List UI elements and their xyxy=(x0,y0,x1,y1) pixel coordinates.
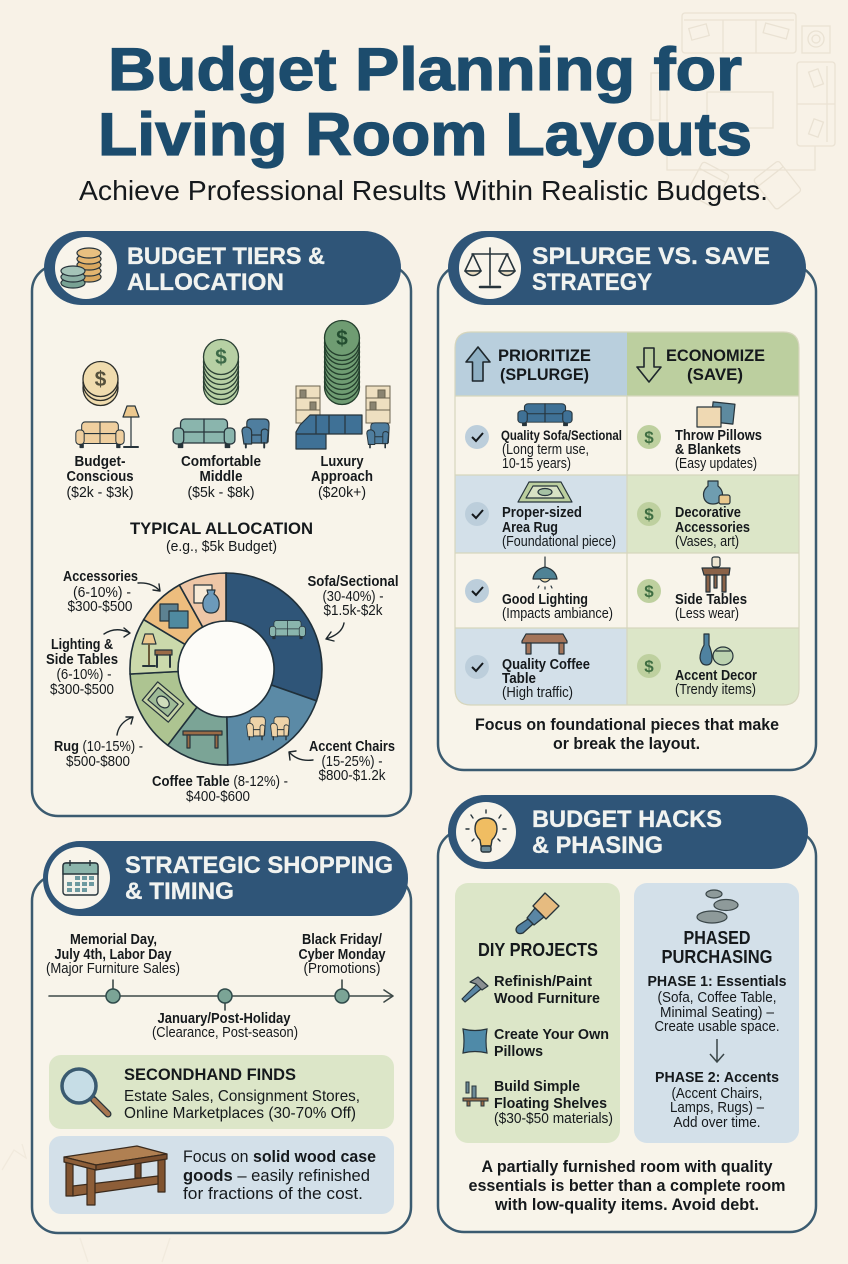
icon: calendar xyxy=(63,860,98,895)
icon: side table xyxy=(702,557,730,592)
tier: comfortable middle: Middle xyxy=(200,469,243,485)
row: quality sofa: (Long term use, xyxy=(502,442,589,458)
item: shelves: ($30-$50 materials) xyxy=(494,1111,613,1127)
item: refinish xyxy=(462,974,600,1007)
icon: coin stack large xyxy=(324,320,360,404)
milestone: black friday: Black Friday/ xyxy=(302,932,382,948)
icon: dollar: $ xyxy=(644,657,654,676)
row: decorative accessories xyxy=(637,481,750,550)
icon: wood coffee table xyxy=(64,1146,167,1205)
milestone: black friday: Cyber Monday xyxy=(298,947,386,963)
callout: secondhand finds: SECONDHAND FINDS xyxy=(124,1065,296,1084)
label: lighting and side tables: $300-$500 xyxy=(50,682,114,698)
row: good lighting: Good Lighting xyxy=(502,592,588,608)
row: quality coffee table: (High traffic) xyxy=(502,685,573,701)
callout: secondhand finds: Online Marketplaces (30-70% Off) xyxy=(124,1105,356,1122)
panel: budget tiers and allocation xyxy=(32,231,411,816)
callout: secondhand finds xyxy=(49,1055,394,1129)
icon: dollar: $ xyxy=(644,428,654,447)
icon: paint brush xyxy=(516,893,559,934)
label: sofa xyxy=(308,574,398,619)
takeaway: budget hacks: with low-quality items. Avoid debt. xyxy=(494,1195,759,1214)
icon: pendant lamp xyxy=(533,557,557,589)
tier: comfortable middle: Comfortable xyxy=(181,454,261,470)
card: DIY projects: DIY PROJECTS xyxy=(478,940,598,960)
item: refinish: Wood Furniture xyxy=(494,991,600,1007)
milestone: black friday xyxy=(298,932,386,977)
phase 2 xyxy=(655,1069,779,1131)
heading: typical allocation: TYPICAL ALLOCATION xyxy=(130,519,313,538)
row: accent decor: Accent Decor xyxy=(675,668,757,684)
row: side tables xyxy=(637,557,747,622)
takeaway: splurge vs save: or break the layout. xyxy=(553,734,700,753)
label: coffee table xyxy=(152,774,288,805)
phase 1: Create usable space. xyxy=(654,1019,780,1035)
label: lighting and side tables: (6-10%) - xyxy=(56,667,112,683)
table backgrounds xyxy=(455,332,799,705)
row: accent decor: (Trendy items) xyxy=(675,682,756,698)
takeaway: budget hacks: essentials is better than a complete room xyxy=(468,1176,786,1195)
row: side tables: Side Tables xyxy=(675,592,747,608)
row: throw pillows: (Easy updates) xyxy=(675,456,757,472)
icon: check xyxy=(465,579,489,603)
row: decorative accessories: Accessories xyxy=(675,520,750,536)
row: good lighting: (Impacts ambiance) xyxy=(502,606,613,622)
label: accessories: Accessories xyxy=(63,569,138,585)
phase 1 xyxy=(648,973,786,1035)
callout: secondhand finds: Estate Sales, Consignment Stores, xyxy=(124,1088,360,1105)
label: lighting and side tables xyxy=(46,637,118,698)
label: rug xyxy=(54,739,143,770)
row: decorative accessories: Decorative xyxy=(675,505,741,521)
label: accessories xyxy=(63,569,138,615)
icon: coin stack small: $ xyxy=(95,368,107,391)
tier: budget-conscious: Budget- xyxy=(74,454,126,470)
label: lighting and side tables: Side Tables xyxy=(46,652,118,668)
tier: budget-conscious: Conscious xyxy=(66,469,134,485)
takeaway: splurge vs save xyxy=(475,715,779,753)
row: area rug: (Foundational piece) xyxy=(502,534,616,550)
icon: check xyxy=(465,655,489,679)
tier: luxury approach: Approach xyxy=(311,469,373,485)
row: quality sofa: 10-15 years) xyxy=(502,456,571,472)
row: quality sofa xyxy=(465,404,622,472)
row: decorative accessories: (Vases, art) xyxy=(675,534,739,550)
item: pillows: Create Your Own xyxy=(494,1027,609,1043)
icon: vases xyxy=(704,481,730,504)
row: area rug xyxy=(465,482,616,550)
callout arrows xyxy=(104,583,344,760)
phase 2: PHASE 2: Accents xyxy=(655,1069,779,1086)
icon: pillows xyxy=(697,402,735,427)
milestone: january xyxy=(152,1011,298,1041)
takeaway: budget hacks: A partially furnished room with quality xyxy=(482,1157,773,1176)
row: quality sofa: Quality Sofa/Sectional xyxy=(501,428,622,443)
item: shelves: Build Simple xyxy=(494,1079,580,1095)
icon: sofa xyxy=(270,621,305,639)
icon: lamp and side table xyxy=(142,634,172,667)
icon: sectional sofa xyxy=(296,415,362,449)
icon: accent vases xyxy=(700,634,733,665)
column header: economize: (SAVE) xyxy=(687,365,743,384)
icon: coin stack medium xyxy=(204,340,238,404)
comparison table xyxy=(455,332,799,705)
phase 2: (Accent Chairs, xyxy=(672,1086,762,1102)
icon: armchair xyxy=(367,423,389,448)
phase 1: PHASE 1: Essentials xyxy=(648,973,786,990)
item: refinish: Refinish/Paint xyxy=(494,974,592,990)
milestone: january: January/Post-Holiday xyxy=(158,1011,291,1027)
tier: budget-conscious xyxy=(66,362,139,501)
panel header: budget hacks: & PHASING xyxy=(532,832,663,859)
icon: light bulb xyxy=(466,810,506,852)
column header: economize xyxy=(637,346,765,384)
icon: magnifier xyxy=(62,1069,108,1114)
callout: solid wood: for fractions of the cost. xyxy=(183,1184,363,1203)
icon: stepping stones xyxy=(697,890,738,923)
subtitle: Achieve Professional Results Within Realistic Budgets. xyxy=(79,175,768,206)
milestone: summer holidays: July 4th, Labor Day xyxy=(54,947,172,963)
milestone: summer holidays: (Major Furniture Sales) xyxy=(46,961,180,977)
row: throw pillows: & Blankets xyxy=(675,442,741,458)
item: pillows xyxy=(463,1027,609,1060)
row: throw pillows: Throw Pillows xyxy=(675,428,762,444)
panel header: strategic shopping: STRATEGIC SHOPPING xyxy=(125,852,393,879)
icon: coffee table xyxy=(522,634,567,654)
panel header: budget tiers: ALLOCATION xyxy=(127,269,284,296)
milestone: black friday: (Promotions) xyxy=(304,961,380,977)
panel header: strategic shopping: & TIMING xyxy=(125,878,234,905)
card: phased purchasing: PHASED xyxy=(684,928,750,948)
label: sofa: (30-40%) - xyxy=(322,589,384,605)
icon: coffee table xyxy=(183,731,222,748)
panel header: splurge vs save: STRATEGY xyxy=(532,269,652,296)
label: accessories: $300-$500 xyxy=(68,599,133,615)
icon: blue armchair xyxy=(242,419,269,448)
row: area rug: Proper-sized xyxy=(502,505,582,521)
icon: dollar: $ xyxy=(644,582,654,601)
icon: balance scales xyxy=(465,248,515,287)
icon: accent chairs xyxy=(247,717,289,740)
icon: coin stack medium: $ xyxy=(215,346,227,369)
label: lighting and side tables: Lighting & xyxy=(51,637,113,653)
phase 1: Minimal Seating) – xyxy=(660,1005,775,1021)
panel header: budget hacks xyxy=(448,795,808,869)
icon: pillows xyxy=(160,604,188,628)
label: accent chairs: $800-$1.2k xyxy=(318,768,386,784)
item: pillows: Pillows xyxy=(494,1044,543,1060)
icon: rug xyxy=(518,482,572,502)
takeaway: splurge vs save: Focus on foundational pieces that make xyxy=(475,715,779,734)
phase 2: Add over time. xyxy=(674,1115,760,1131)
icon: hammer xyxy=(462,977,488,1002)
card: phased purchasing xyxy=(634,883,799,1143)
row: area rug: Area Rug xyxy=(502,520,558,536)
panel: strategic shopping xyxy=(32,841,411,1233)
panel header: splurge vs save: SPLURGE VS. SAVE xyxy=(532,243,770,270)
icon: coin stack large: $ xyxy=(336,327,348,350)
tier: comfortable middle xyxy=(173,340,269,501)
icon: bookcases xyxy=(296,386,390,423)
label: rug: Rug (10-15%) - xyxy=(54,739,143,755)
panel header: strategic shopping xyxy=(43,841,408,916)
row: side tables: (Less wear) xyxy=(675,606,739,622)
milestone: january: (Clearance, Post-season) xyxy=(152,1025,298,1041)
heading: typical allocation: (e.g., $5k Budget) xyxy=(166,539,277,555)
icon: frame and vase xyxy=(194,585,219,613)
card: phased purchasing: PURCHASING xyxy=(662,947,772,967)
panel: splurge vs save xyxy=(438,231,816,770)
donut icons xyxy=(142,585,305,748)
panel header: budget tiers: BUDGET TIERS & xyxy=(127,243,325,270)
icon: teal sofa xyxy=(173,419,235,448)
label: accessories: (6-10%) - xyxy=(73,585,131,601)
title xyxy=(98,36,752,168)
label: accent chairs: Accent Chairs xyxy=(309,739,395,755)
tier: comfortable middle: ($5k - $8k) xyxy=(188,485,254,501)
label: coffee table: $400-$600 xyxy=(186,789,250,805)
tier: luxury approach: Luxury xyxy=(320,454,364,470)
arrow: phase 1 to phase 2 xyxy=(710,1039,724,1062)
heading: typical allocation xyxy=(130,519,313,555)
row: good lighting xyxy=(465,557,613,622)
card: DIY projects xyxy=(455,883,620,1143)
label: rug: $500-$800 xyxy=(66,754,130,770)
icon: floor lamp xyxy=(123,406,139,447)
label: coffee table: Coffee Table (8-12%) - xyxy=(152,774,288,790)
tier: luxury approach: ($20k+) xyxy=(318,485,366,501)
column header: prioritize: (SPLURGE) xyxy=(500,365,589,384)
donut chart xyxy=(130,573,322,765)
tier: budget-conscious: ($2k - $3k) xyxy=(66,485,134,501)
donut labels xyxy=(46,569,398,805)
icon: check xyxy=(465,425,489,449)
milestone: summer holidays: Memorial Day, xyxy=(70,932,157,948)
milestone: summer holidays xyxy=(46,932,180,977)
title: Living Room Layouts xyxy=(98,101,752,168)
item: shelves xyxy=(463,1079,613,1127)
panel header: splurge vs save xyxy=(448,231,806,305)
icon: dollar: $ xyxy=(644,505,654,524)
column header: prioritize: PRIORITIZE xyxy=(498,346,591,365)
row: throw pillows xyxy=(637,402,762,472)
title: Budget Planning for xyxy=(108,36,742,103)
callout: solid wood: goods – easily refinished xyxy=(183,1166,370,1185)
column header: economize: ECONOMIZE xyxy=(666,346,765,365)
icon: pillow xyxy=(463,1029,487,1053)
label: accent chairs: (15-25%) - xyxy=(322,754,383,770)
panel header: budget tiers xyxy=(44,231,401,305)
timeline xyxy=(46,932,393,1041)
row: quality coffee table xyxy=(465,634,590,701)
takeaway: budget hacks xyxy=(468,1157,786,1214)
tier: luxury approach xyxy=(296,320,390,501)
icon: rug xyxy=(142,682,184,722)
icon: sofa xyxy=(518,404,572,426)
item: shelves: Floating Shelves xyxy=(494,1096,607,1112)
callout: solid wood: Focus on solid wood case xyxy=(183,1147,376,1166)
label: sofa: $1.5k-$2k xyxy=(324,603,383,619)
icon: floating shelf xyxy=(463,1082,488,1106)
phase 2: Lamps, Rugs) – xyxy=(670,1100,765,1116)
phase 1: (Sofa, Coffee Table, xyxy=(658,990,776,1006)
row: quality coffee table: Table xyxy=(502,671,536,687)
icon: small sofa xyxy=(76,422,124,448)
label: sofa: Sofa/Sectional xyxy=(308,574,398,590)
column header: prioritize xyxy=(466,346,591,384)
icon: check xyxy=(465,502,489,526)
callout: solid wood xyxy=(49,1136,394,1214)
panel: budget hacks xyxy=(438,795,816,1232)
panel header: budget hacks: BUDGET HACKS xyxy=(532,806,722,833)
label: accent chairs xyxy=(309,739,395,784)
row: accent decor xyxy=(637,634,757,698)
row: quality coffee table: Quality Coffee xyxy=(502,657,590,673)
